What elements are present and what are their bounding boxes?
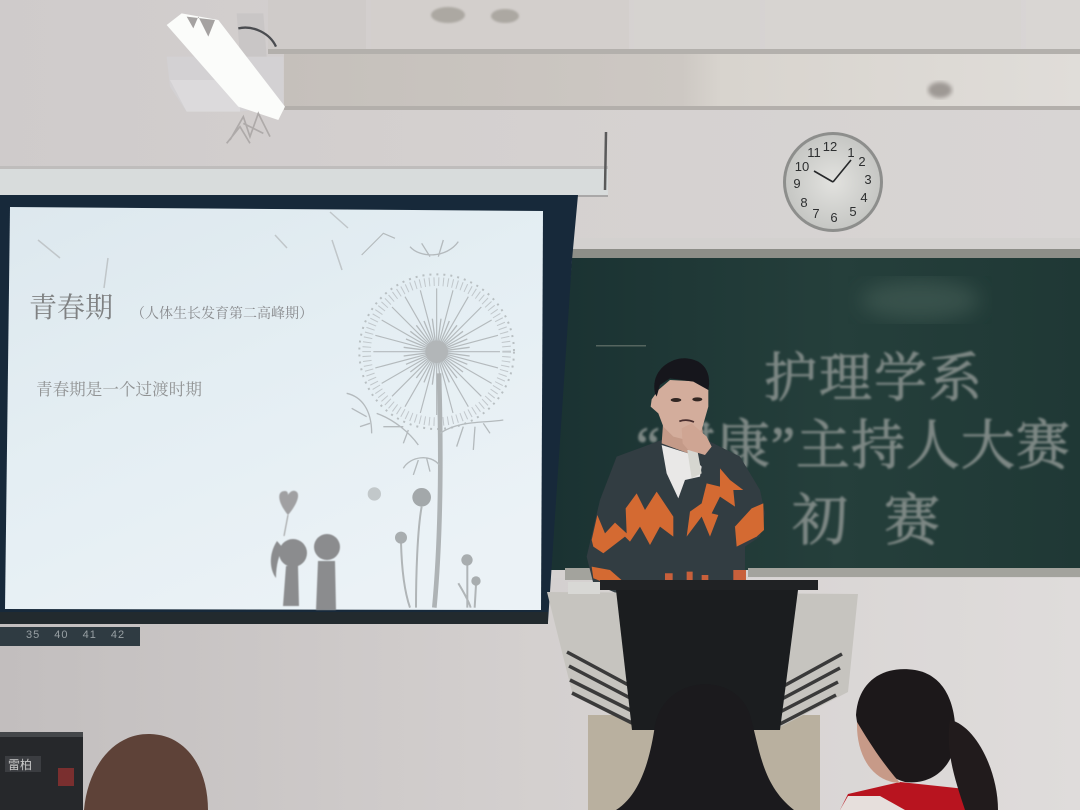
slide subheading: （人体生长发育第二高峰期） <box>131 305 313 322</box>
screen housing <box>0 132 608 197</box>
wall clock: 2 <box>858 154 866 169</box>
ceiling panels <box>268 0 1080 54</box>
projection screen <box>0 195 578 624</box>
hand and microphone <box>682 423 712 478</box>
chalkboard: 护理学系 <box>764 350 984 408</box>
slide body text: 青春期是一个过渡时期 <box>36 380 202 399</box>
chalkboard: “健康”主持人大赛 <box>636 416 1071 476</box>
wall clock: 3 <box>864 172 872 187</box>
chalkboard <box>548 238 1080 580</box>
drifting seeds <box>38 212 348 288</box>
slide heading: 青春期 <box>29 292 113 324</box>
audience member left <box>84 734 208 810</box>
screen corner sticker <box>0 627 140 646</box>
speaker sweater <box>587 440 765 593</box>
audience member centre <box>616 684 794 810</box>
wall clock: 4 <box>860 190 868 205</box>
wall clock <box>783 132 883 232</box>
wall clock: 11 <box>807 145 821 160</box>
wall clock: 8 <box>800 195 808 210</box>
lectern <box>547 580 858 810</box>
wall clock: 7 <box>812 206 820 221</box>
wall clock: 6 <box>830 210 838 225</box>
speaker head <box>651 358 709 453</box>
silhouette couple with heart <box>271 491 340 610</box>
ceiling projector and light <box>167 13 285 143</box>
speaker <box>587 358 765 593</box>
screen corner sticker: 35 40 41 42 <box>26 629 125 641</box>
wall clock: 1 <box>847 145 855 160</box>
wall clock: 10 <box>795 159 809 174</box>
wall clock: 5 <box>849 204 857 219</box>
audience member right <box>840 669 998 810</box>
speaker unit on desk <box>0 732 83 810</box>
ceiling beam <box>284 54 1080 110</box>
wall clock: 9 <box>793 176 801 191</box>
dandelion illustration <box>347 233 514 608</box>
speaker unit on desk: 雷柏 <box>8 757 32 772</box>
chalkboard: 初赛 <box>792 491 976 553</box>
wall clock: 12 <box>823 139 837 154</box>
